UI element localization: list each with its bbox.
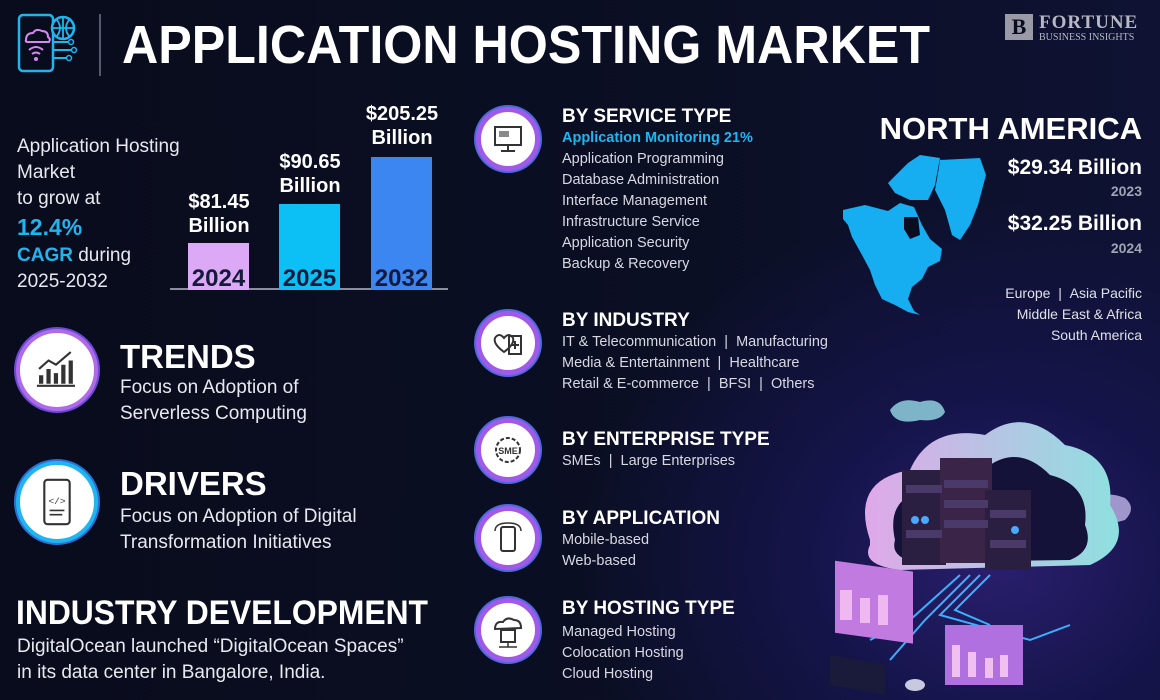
panel: by industry: BY INDUSTRY [562,310,690,331]
panel: industry development: in its data center in Bangalore, India. [17,662,325,683]
icon: server cloud [476,598,540,662]
panel: by application: Mobile-based [562,532,649,548]
panel: by hosting type: Colocation Hosting [562,645,684,661]
illustration: cloud servers [830,400,1131,694]
text: market growth: to grow at [17,188,100,209]
panel: drivers: Focus on Adoption of Digital [120,506,357,527]
panel: by service type: Infrastructure Service [562,214,700,230]
panel: drivers [14,459,357,553]
panel: trends: Focus on Adoption of [120,377,299,398]
panel: north america: Middle East & Africa [1017,306,1142,322]
panel: north america: 2024 [1111,240,1142,256]
icon: north america map [843,155,986,315]
panel: by hosting type [474,596,735,682]
panel: by service type: Backup & Recovery [562,256,689,272]
panel: by enterprise type: SMEs | Large Enterprises [562,453,735,469]
panel: by service type: Database Administration [562,172,719,188]
panel: by service type: Interface Management [562,193,707,209]
panel: north america: $32.25 Billion [1008,212,1142,235]
icon: logo phone cloud [18,14,78,72]
icon: mobile cloud [476,506,540,570]
bar chart: $90.65 [279,151,341,173]
text: market growth: 12.4% [17,214,82,240]
panel: north america: South America [1051,327,1142,343]
text: market growth: CAGR during [17,245,131,266]
icon: trends chart [16,329,98,411]
panel: by enterprise type: BY ENTERPRISE TYPE [562,429,770,450]
text: market growth [17,136,180,292]
panel: by service type: Application Security [562,235,689,251]
panel: by service type: BY SERVICE TYPE [562,106,731,127]
bar chart: Billion [371,127,433,149]
panel: industry development: DigitalOcean launched “DigitalOcean Spaces” [17,636,404,657]
bar chart: Billion [279,175,341,197]
bar chart: $81.45 [188,191,250,213]
panel: trends: Serverless Computing [120,403,307,424]
panel: north america: Europe | Asia Pacific [1005,285,1142,301]
panel: by industry [474,309,828,392]
bar chart: $205.25 [366,103,438,125]
panel: north america: NORTH AMERICA [880,111,1142,146]
panel: by hosting type: BY HOSTING TYPE [562,598,735,619]
icon: drivers code: </> [48,496,66,507]
panel: by hosting type: Managed Hosting [562,624,676,640]
bar chart: 2032 [375,265,428,292]
panel: by application [474,504,720,572]
panel: by application: Web-based [562,553,636,569]
panel: drivers: DRIVERS [120,465,267,502]
icon: monitor [476,107,540,171]
bar chart [170,103,448,292]
icon: drivers code [16,461,98,543]
icon: SME: SME [498,446,518,456]
panel: by service type [474,105,753,272]
panel: by industry: Media & Entertainment | Healthcare [562,355,800,371]
panel: industry development [16,594,428,683]
logo: Fortune Business Insights: FORTUNE [1039,12,1138,33]
panel: by service type: Application Monitoring 21% [562,130,753,146]
panel: drivers: Transformation Initiatives [120,532,332,553]
text: market growth: Application Hosting [17,136,180,157]
panel: by application: BY APPLICATION [562,508,720,529]
panel: north america [843,111,1142,343]
logo: Fortune Business Insights [1005,12,1138,43]
panel: by service type: Application Programming [562,151,724,167]
bar chart: 2025 [283,265,336,292]
panel: north america: 2023 [1111,183,1142,199]
logo: Fortune Business Insights: B [1012,14,1026,39]
panel: by enterprise type [474,416,770,484]
panel: by industry: Retail & E-commerce | BFSI | Others [562,376,814,392]
icon: SME [476,418,540,482]
panel: trends [14,327,307,424]
panel: by industry: IT & Telecommunication | Manufacturing [562,334,828,350]
panel: trends: TRENDS [120,338,256,375]
text: market growth: 2025-2032 [17,271,108,292]
logo: Fortune Business Insights: BUSINESS INSIGHTS [1039,32,1134,43]
bar chart: 2024 [192,265,245,292]
icon: health [476,311,540,375]
panel: north america: $29.34 Billion [1008,156,1142,179]
bar chart: Billion [188,215,250,237]
text: market growth: Market [17,162,75,183]
panel: by hosting type: Cloud Hosting [562,666,653,682]
